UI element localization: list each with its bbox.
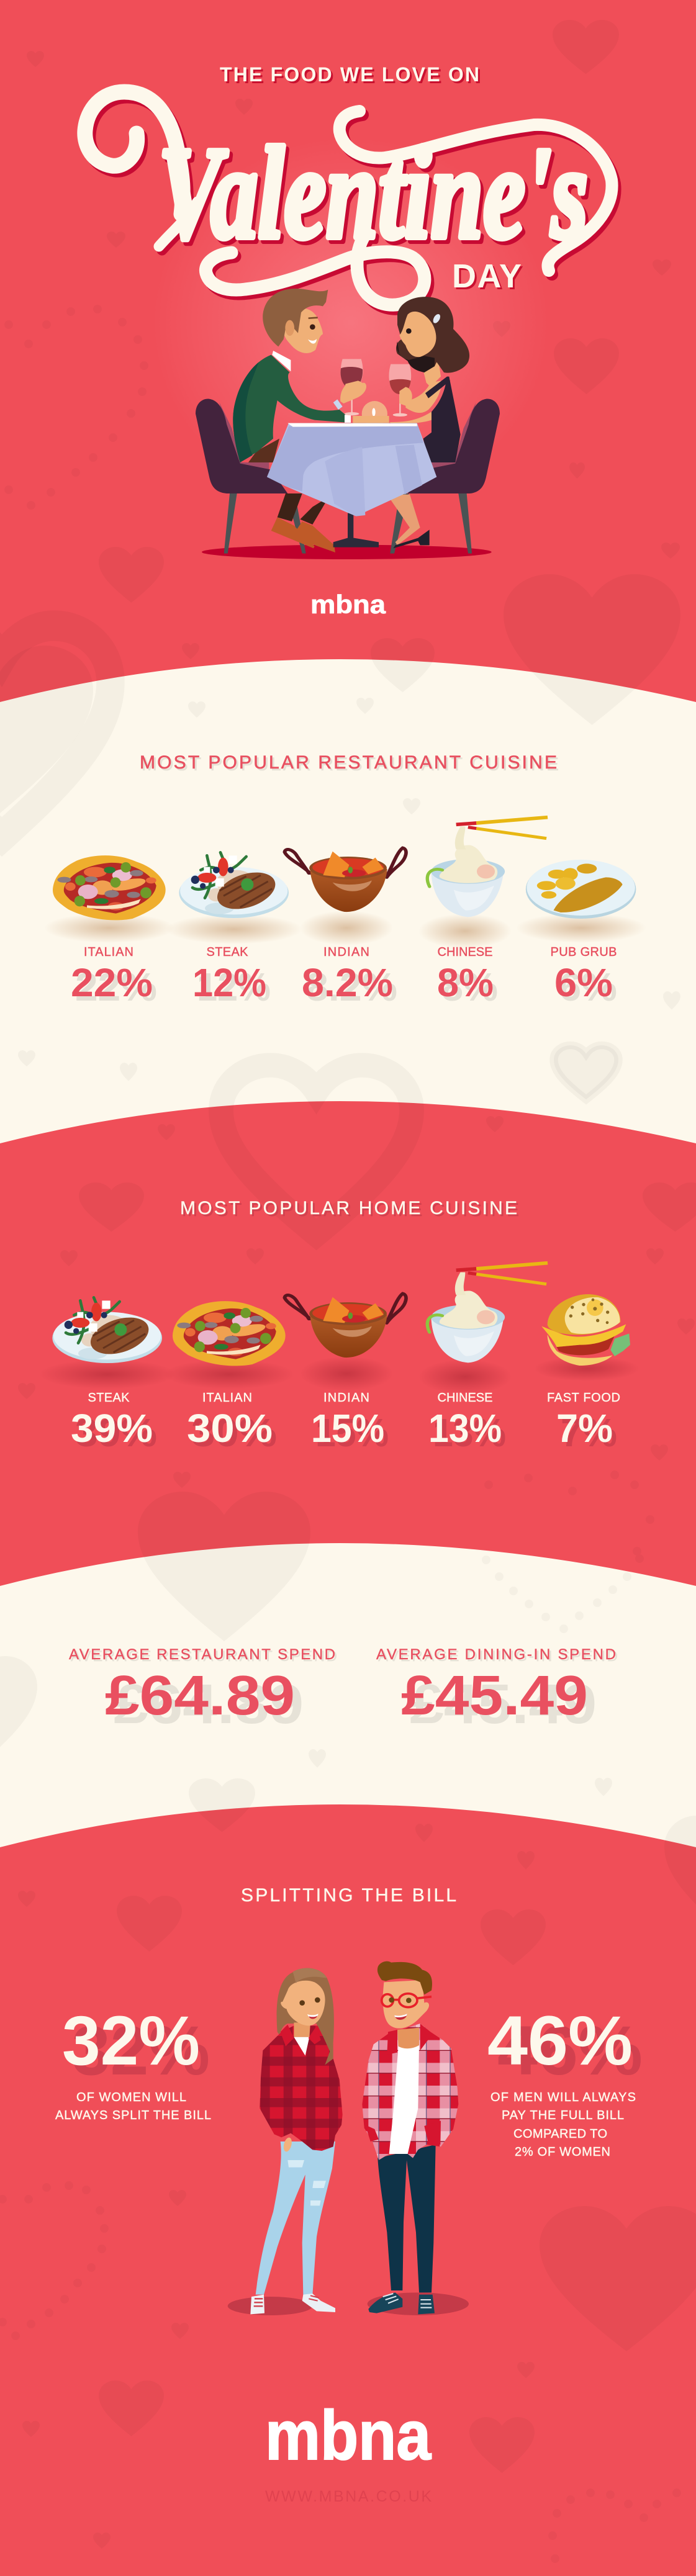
panel: splitting the bill [55, 1885, 636, 2505]
food: pub grub, fish and chips [516, 860, 646, 943]
illustration: woman and man in plaid shirts [228, 1961, 469, 2315]
panel: restaurant cuisine background wave [0, 659, 696, 1143]
food: chinese noodles [418, 817, 548, 948]
food: fast food burger [534, 1294, 640, 1381]
stat: pub grub 6%: 6% [554, 960, 613, 1005]
table [267, 423, 436, 547]
stat: men 46% [487, 2002, 636, 2159]
food: indian karahi curry [284, 848, 406, 945]
man [233, 289, 366, 552]
stat: fast food 7% [547, 1391, 620, 1451]
stat: italian 22%: 22% [71, 960, 153, 1005]
stat: steak 39%: STEAK [88, 1391, 130, 1405]
title: the food we love on: THE FOOD WE LOVE ON [220, 63, 479, 86]
title: day: DAY [452, 258, 522, 295]
food: indian karahi curry [284, 1294, 406, 1391]
stat: fast food 7%: 7% [556, 1406, 613, 1451]
stat: pub grub 6% [550, 945, 617, 1005]
stat: chinese 13%: 13% [428, 1406, 502, 1451]
stat: chinese 13%: CHINESE [437, 1391, 493, 1405]
logo: mbna: mbna [265, 2397, 432, 2474]
stat: men 46%: PAY THE FULL BILL [502, 2109, 624, 2122]
stat: steak 39%: 39% [71, 1406, 153, 1451]
man [362, 1961, 458, 2314]
wine glasses and candle [341, 359, 412, 426]
glow behind couple [152, 137, 549, 509]
title: Valentine's script lettering with flourishes [85, 92, 612, 305]
food: pizza, italian [164, 1301, 294, 1389]
stat: italian 30%: ITALIAN [202, 1391, 252, 1405]
stat: men 46%: 2% OF WOMEN [515, 2145, 610, 2159]
stat: indian 8.2%: INDIAN [323, 945, 369, 959]
panel: average spend [69, 1646, 616, 1727]
stat: average dining-in spend: £45.49 [401, 1665, 588, 1727]
heading: MOST POPULAR HOME CUISINE [180, 1198, 517, 1218]
food: steak [39, 1297, 176, 1389]
left chair [196, 399, 306, 554]
food: chinese noodles [418, 1263, 548, 1394]
panel: most popular restaurant cuisine [44, 752, 646, 1005]
stat: steak 12%: STEAK [206, 945, 248, 959]
illustration: couple at dinner table [196, 289, 500, 559]
right chair [390, 399, 500, 554]
food: pizza, italian [44, 855, 174, 943]
stat: italian 22%: ITALIAN [84, 945, 133, 959]
heading: MOST POPULAR RESTAURANT CUISINE [140, 752, 557, 773]
stat: italian 30%: 30% [187, 1406, 273, 1451]
panel: spend background wave [0, 1543, 696, 1847]
woman [387, 297, 469, 548]
floor shadows [228, 2292, 469, 2315]
woman [250, 1968, 343, 2314]
stat: men 46%: 46% [487, 2002, 633, 2079]
stat: women 32%: 32% [62, 2002, 200, 2079]
panel: header [85, 63, 612, 619]
stat: chinese 8%: 8% [437, 960, 494, 1005]
stat: pub grub 6%: PUB GRUB [550, 945, 617, 959]
stat: indian 15%: 15% [311, 1406, 384, 1451]
stat: fast food 7%: FAST FOOD [547, 1391, 620, 1405]
stat: average dining-in spend: AVERAGE DINING-IN SPEND [376, 1646, 616, 1663]
stat: average dining-in spend [376, 1646, 616, 1727]
stat: average restaurant spend: AVERAGE RESTAURANT SPEND [69, 1646, 335, 1663]
logo: mbna: mbna [310, 590, 386, 619]
stat: chinese 8%: CHINESE [437, 945, 493, 959]
stat: men 46%: OF MEN WILL ALWAYS [490, 2091, 636, 2104]
stat: men 46%: COMPARED TO [513, 2127, 607, 2141]
stat: women 32%: ALWAYS SPLIT THE BILL [55, 2109, 211, 2122]
stat: indian 15%: INDIAN [323, 1391, 369, 1405]
food: steak [166, 852, 302, 944]
stat: women 32%: OF WOMEN WILL [76, 2091, 186, 2104]
stat: indian 8.2%: 8.2% [302, 960, 393, 1005]
website url: WWW.MBNA.CO.UK [265, 2488, 432, 2505]
stat: steak 12%: 12% [192, 960, 266, 1005]
stat: average restaurant spend: £64.89 [105, 1665, 295, 1727]
floor shadow [202, 545, 492, 559]
stat: women 32% [55, 2002, 211, 2122]
stat: average restaurant spend [69, 1646, 335, 1727]
heading: SPLITTING THE BILL [241, 1885, 456, 1906]
panel: most popular home cuisine [39, 1198, 640, 1451]
stat: italian 30% [187, 1391, 273, 1451]
